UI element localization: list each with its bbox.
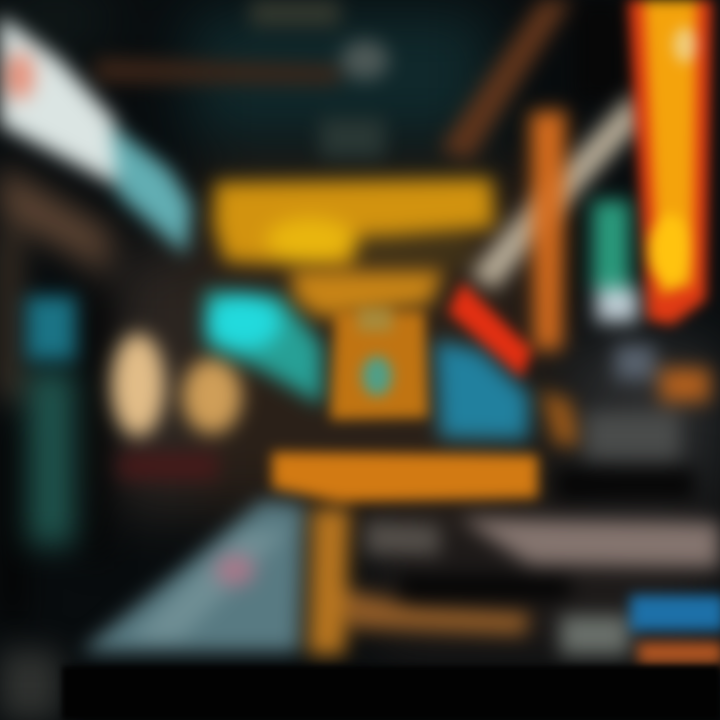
bottom: black band [62, 666, 720, 720]
right side: blue stripe [630, 595, 720, 631]
right side: grey pink counter stripes [365, 518, 720, 655]
sign: cyan and teal panel [205, 290, 322, 405]
sign: green panel with white base [592, 200, 638, 322]
right side: street details [555, 345, 710, 500]
right side: orange stripe [638, 642, 720, 664]
sign: large yellow and red vertical banner [628, 0, 712, 325]
sign: white and pale blue left banner [0, 15, 192, 255]
floor: grey blue walkway [80, 500, 305, 652]
sign: teal left panel [26, 296, 76, 360]
lights: warm storefront lamps [111, 333, 242, 480]
sign: orange crossbar [290, 270, 445, 318]
support: orange pole and arm [308, 508, 530, 655]
ceiling lights and beams [95, 0, 625, 160]
sign: yellow central board [213, 178, 495, 268]
sign: orange vertical banner [530, 110, 582, 445]
sign: red diagonal flag [448, 282, 532, 378]
sign: white diagonal stripe [470, 92, 640, 290]
sign: wide orange lower bar [272, 452, 538, 502]
sign: blue panel [435, 340, 530, 440]
left wall: dark lower storefront [0, 165, 110, 720]
sign: orange central post with teal window [330, 308, 428, 420]
